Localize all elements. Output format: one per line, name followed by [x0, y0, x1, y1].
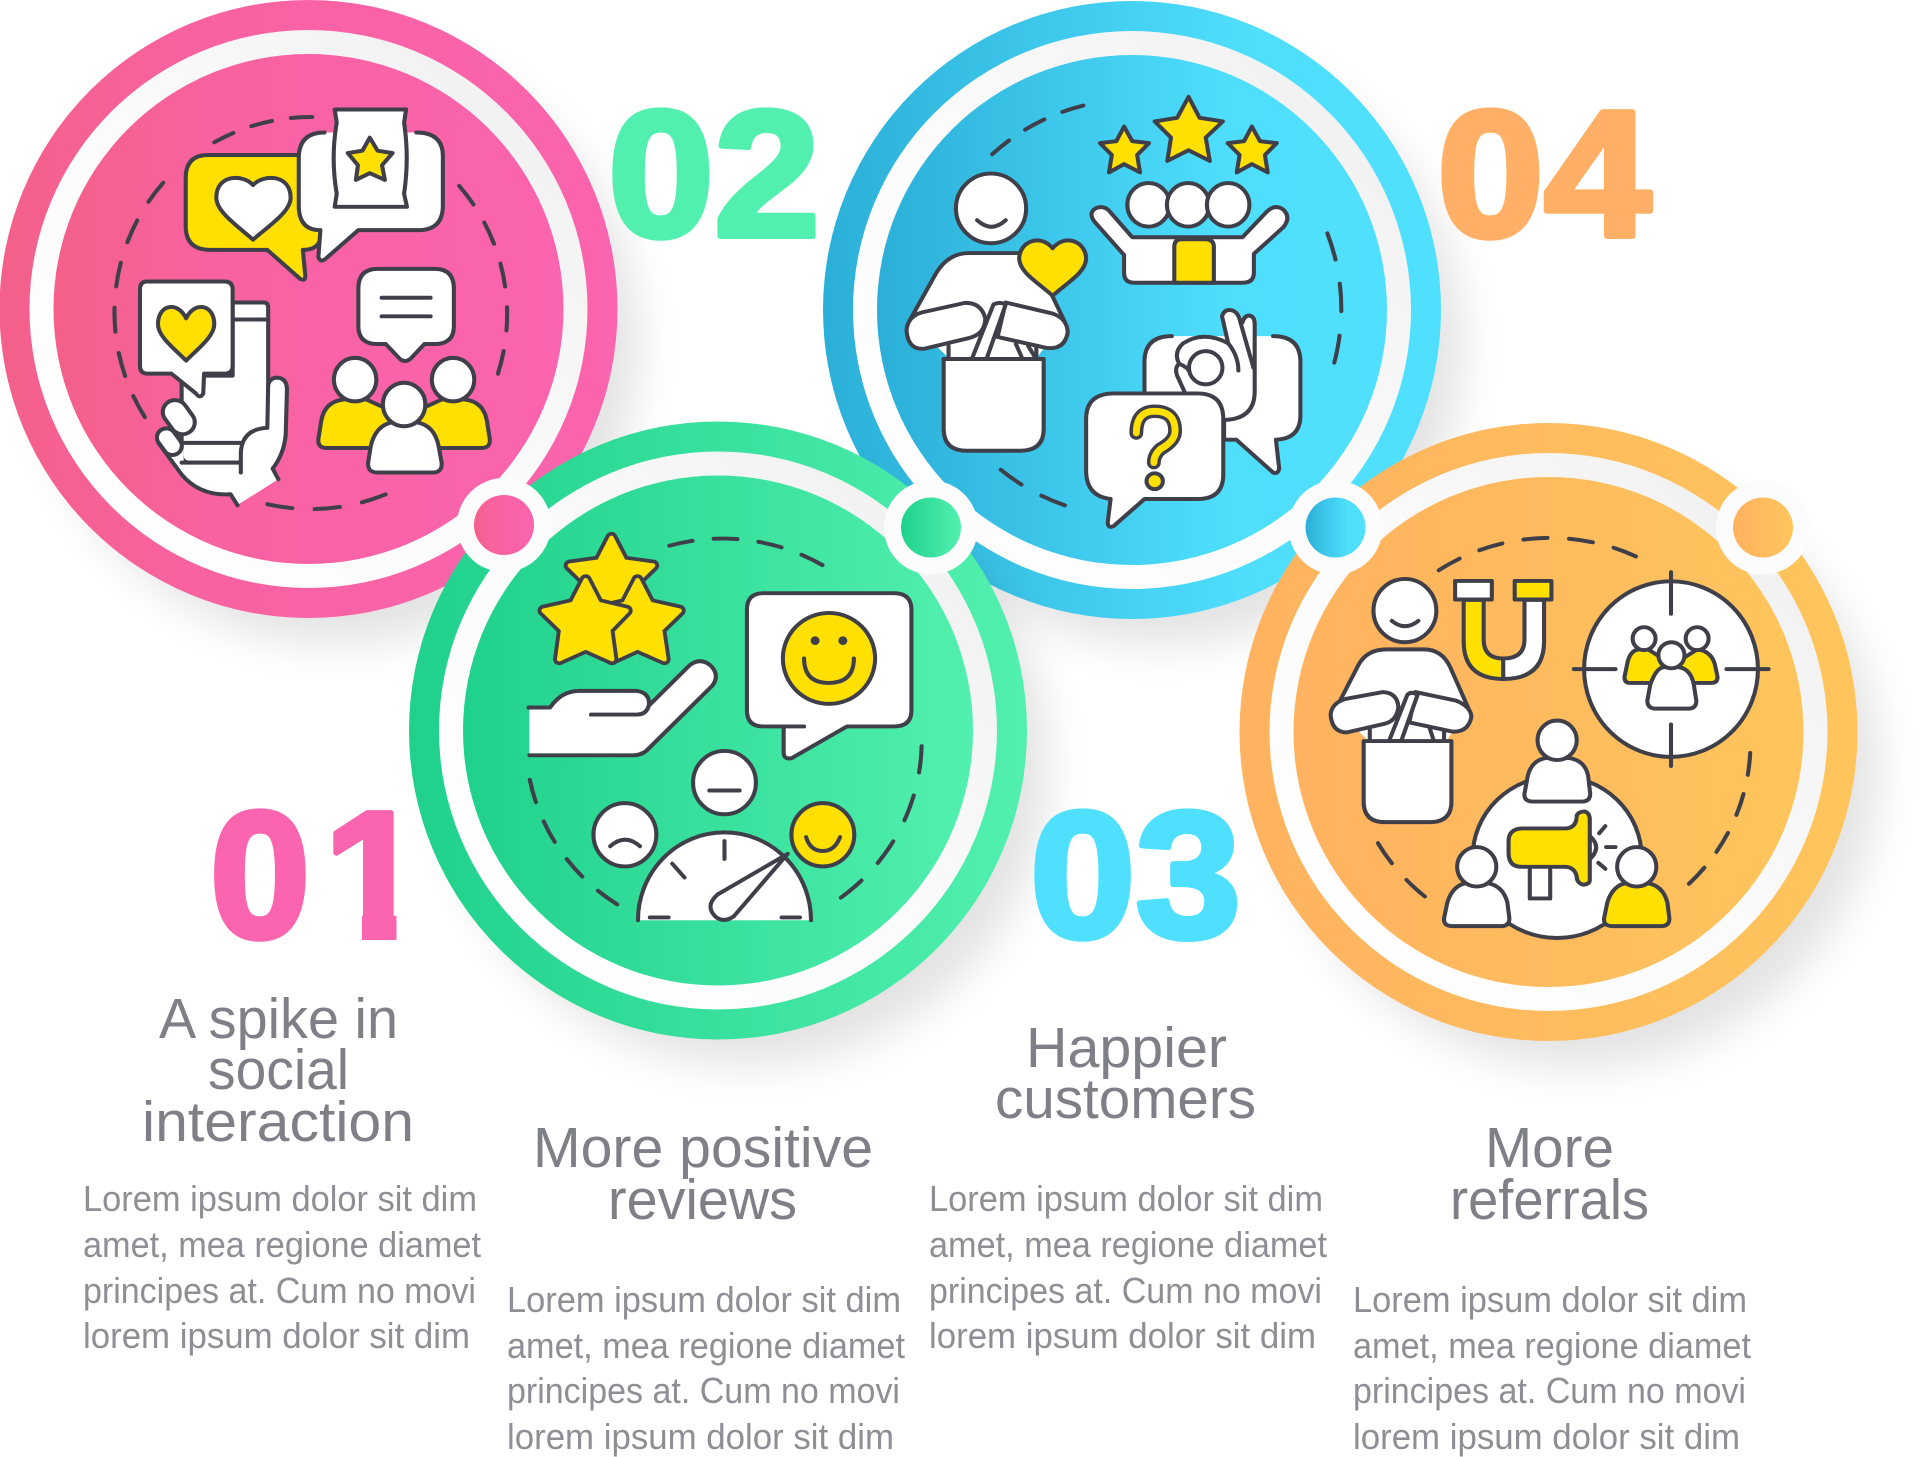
heading: A spike in social interaction: [142, 987, 414, 1154]
panel: circle 1 pink: [0, 0, 638, 644]
text block: column 1: Lorem ipsum dolor sit dim: [83, 1178, 477, 1219]
icon: happier customers set: [907, 97, 1341, 527]
connector dot: green: [884, 480, 978, 574]
icon: positive reviews set: [529, 538, 922, 920]
heading: A spike in social interaction: A spike in: [159, 987, 398, 1051]
number 04: 04: [1437, 74, 1651, 275]
text block: column 2: Lorem ipsum dolor sit dim: [507, 1279, 901, 1320]
text block: column 2: principes at. Cum no movi: [507, 1370, 900, 1411]
number 01: 01: [210, 775, 424, 976]
connector dot: orange: [1716, 480, 1810, 574]
text block: column 3: amet, mea regione diamet: [929, 1224, 1327, 1265]
connector dot: pink: [457, 478, 551, 572]
text block: column 2: lorem ipsum dolor sit dim: [507, 1416, 894, 1457]
heading: More referrals: referrals: [1450, 1168, 1649, 1232]
text block: column 4: principes at. Cum no movi: [1353, 1370, 1746, 1411]
text block: column 3: Lorem ipsum dolor sit dim: [929, 1178, 1323, 1219]
number 03: 03: [1030, 775, 1241, 976]
heading: More positive reviews: [533, 1116, 873, 1232]
text block: column 2: [507, 1279, 905, 1457]
heading: More positive reviews: reviews: [608, 1168, 797, 1232]
panel: circle 4 orange: [1240, 423, 1878, 1067]
text block: column 4: lorem ipsum dolor sit dim: [1353, 1416, 1740, 1457]
text block: column 4: [1353, 1279, 1751, 1457]
heading: More referrals: More: [1485, 1116, 1614, 1180]
heading: A spike in social interaction: social: [208, 1038, 349, 1102]
text block: column 2: amet, mea regione diamet: [507, 1325, 905, 1366]
heading: Happier customers: Happier: [1026, 1016, 1227, 1080]
text block: column 4: Lorem ipsum dolor sit dim: [1353, 1279, 1747, 1320]
panel: circle 2 green: [409, 422, 1048, 1065]
connector dot: blue: [1288, 480, 1382, 574]
panel: circle 3 blue: [823, 1, 1462, 645]
heading: Happier customers: [995, 1016, 1256, 1131]
number 02: 02: [608, 74, 820, 275]
text block: column 3: principes at. Cum no movi: [929, 1270, 1322, 1311]
heading: A spike in social interaction: interaction: [142, 1090, 414, 1154]
heading: More positive reviews: More positive: [533, 1116, 873, 1180]
text block: column 1: lorem ipsum dolor sit dim: [83, 1315, 470, 1356]
text block: column 1: amet, mea regione diamet: [83, 1224, 481, 1265]
icon: social interaction set: [114, 110, 507, 509]
text block: column 3: [929, 1178, 1327, 1356]
heading: Happier customers: customers: [995, 1067, 1256, 1131]
icon: referrals set: [1331, 538, 1769, 938]
text block: column 3: lorem ipsum dolor sit dim: [929, 1315, 1316, 1356]
text block: column 1: principes at. Cum no movi: [83, 1270, 476, 1311]
heading: More referrals: [1450, 1116, 1649, 1232]
text block: column 1: [83, 1178, 481, 1356]
text block: column 4: amet, mea regione diamet: [1353, 1325, 1751, 1366]
